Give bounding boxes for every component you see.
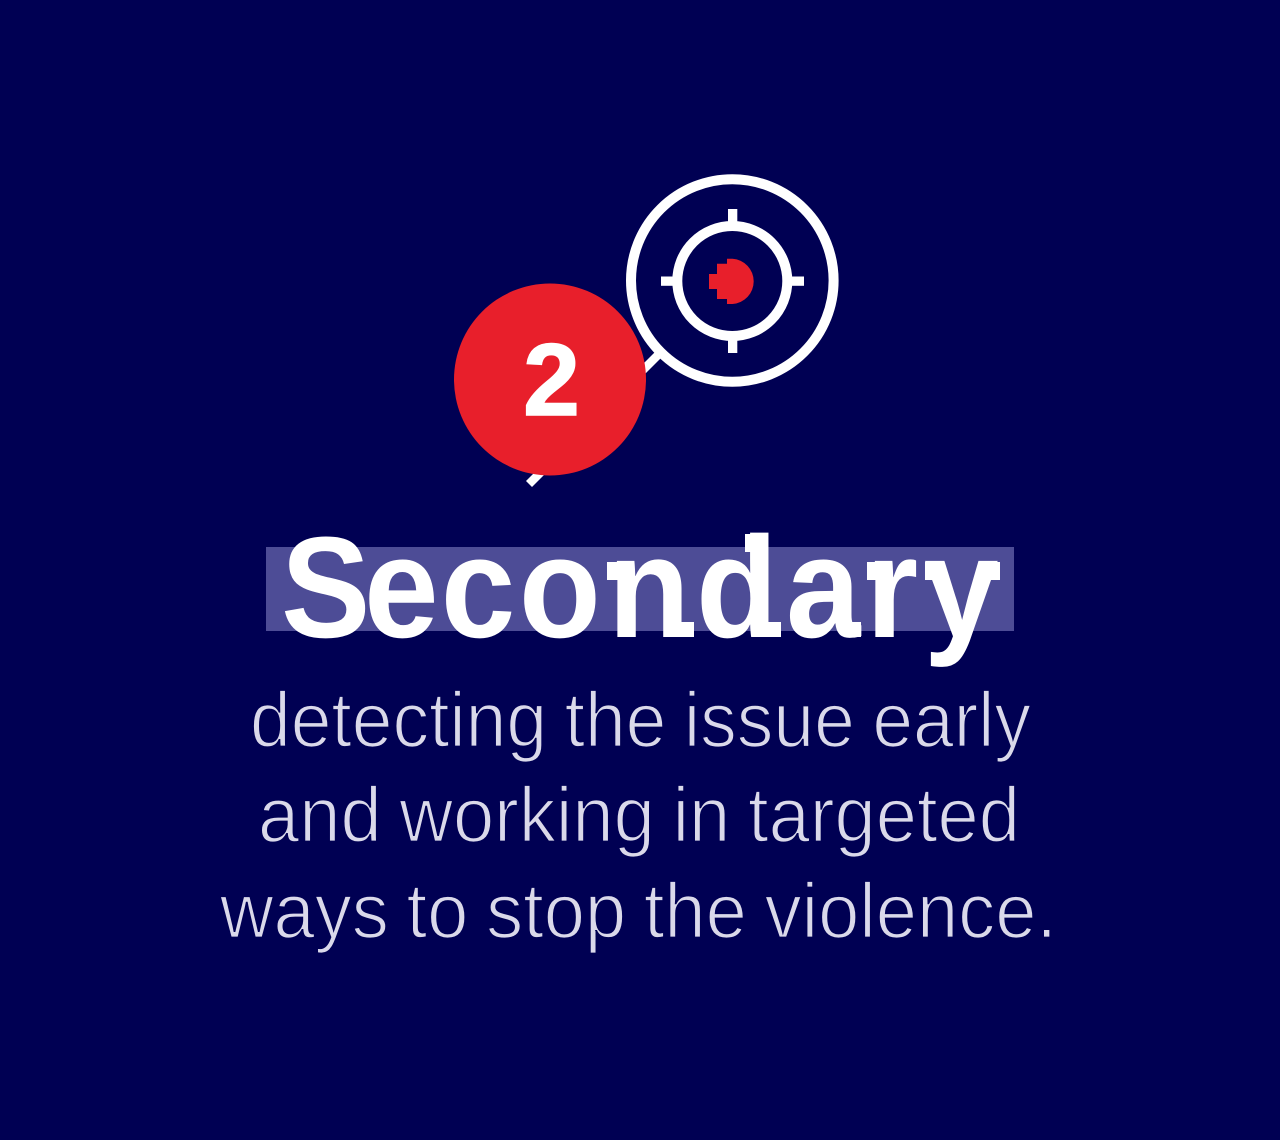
body text: and working in targeted [258,770,1020,858]
icon: magnifying glass over target [529,179,834,484]
heading: Secondary: Secondary [281,508,998,668]
body text: ways to stop the violence. [219,866,1057,954]
icon: red target dot [709,259,754,304]
number badge: 2 [523,323,580,437]
number badge [454,284,646,476]
body text [219,676,1057,954]
body text: detecting the issue early [250,676,1031,764]
